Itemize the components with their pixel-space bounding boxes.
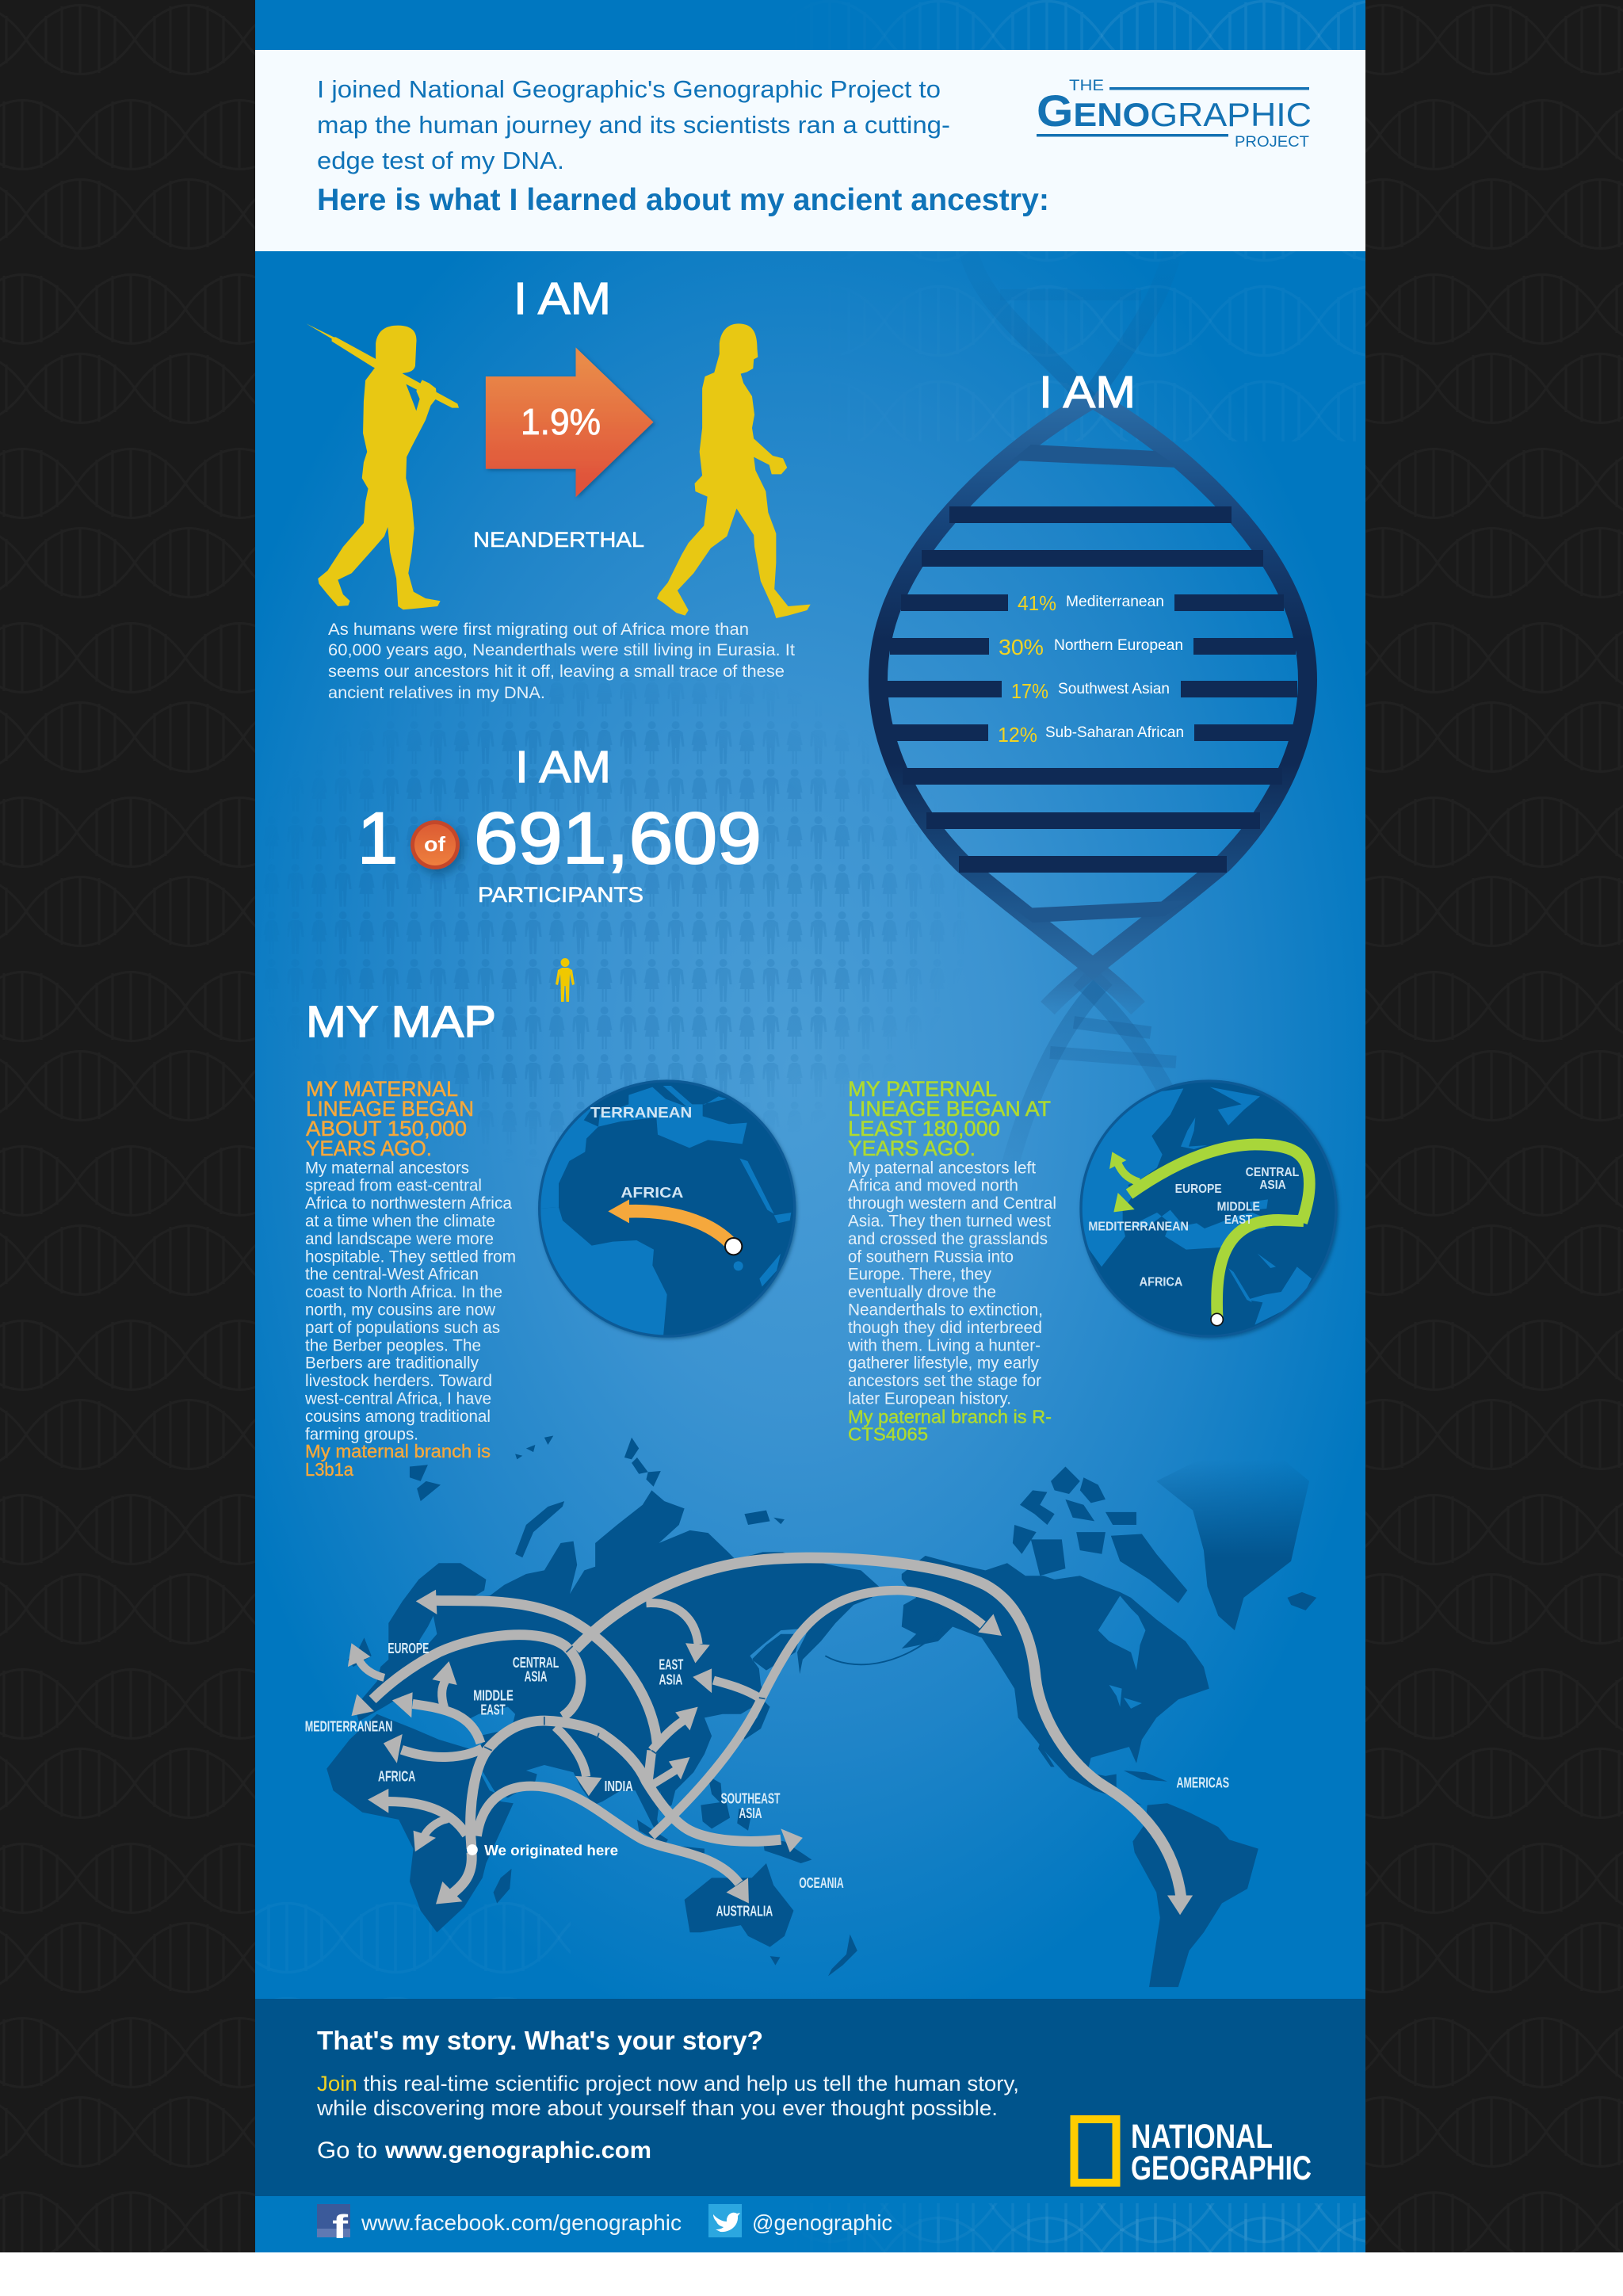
figure: modern human walking xyxy=(657,323,811,618)
paternal branch: CTS4065 xyxy=(848,1424,928,1445)
website link: www.genographic.com xyxy=(384,2137,651,2164)
intro text: I joined National Geographic's Genographic Project to xyxy=(317,75,941,103)
paternal heading: MY PATERNAL xyxy=(848,1077,997,1101)
arrow: east across Asia to Oceania xyxy=(544,1721,803,1852)
logo: National Geographic xyxy=(1075,2118,1312,2187)
logo: National Geographic: NATIONAL xyxy=(1131,2118,1273,2156)
people crowd background pattern xyxy=(458,726,874,1097)
row: Sub-Saharan African: Sub-Saharan African xyxy=(1045,724,1184,741)
arrow: Central Asia loop to Mediterranean xyxy=(351,1635,581,1717)
helix strands xyxy=(878,399,1308,1008)
arrow: north across Asia to the Americas xyxy=(575,1558,1193,1915)
panel: header xyxy=(255,50,1365,251)
region labels: MIDDLE xyxy=(473,1687,514,1703)
row: Southwest Asian xyxy=(1011,679,1170,703)
stat: 1 of 691,609 participants: 691,609 xyxy=(474,798,762,879)
twitter handle: @genographic xyxy=(752,2210,892,2235)
paternal body: Neanderthals to extinction, xyxy=(848,1301,1043,1319)
panel: footer call to action xyxy=(255,1999,1365,2196)
row: Southwest Asian: 17% xyxy=(1011,679,1048,703)
maternal body: north, my cousins are now xyxy=(305,1301,496,1319)
region labels: AUSTRALIA xyxy=(716,1903,773,1920)
orange migration arrow xyxy=(608,1199,742,1255)
paternal body: Africa and moved north xyxy=(848,1177,1018,1195)
region labels: SOUTHEAST xyxy=(721,1790,781,1807)
arrow: southern Europe xyxy=(392,1692,480,1744)
maternal body xyxy=(304,1159,516,1443)
maternal heading xyxy=(306,1077,474,1160)
globe labels xyxy=(1088,1166,1299,1289)
footer body xyxy=(316,2072,1019,2120)
ghost DNA strand below main helix xyxy=(1000,979,1212,1205)
globe labels: MEDITERRANEAN xyxy=(1088,1220,1189,1233)
paternal body: gatherer lifestyle, my early xyxy=(848,1354,1039,1373)
footer body: Join this real-time scientific project now and help us tell the human story, xyxy=(317,2072,1019,2095)
logo: The Genographic Project: THE xyxy=(1069,78,1104,94)
icon: yellow person xyxy=(556,958,575,1002)
arrow: central Africa xyxy=(414,1819,448,1851)
region labels: EAST xyxy=(659,1656,684,1672)
maternal body: cousins among traditional xyxy=(305,1408,491,1426)
arrow: East Asia from Japan xyxy=(693,1668,759,1698)
paternal body: through western and Central xyxy=(848,1194,1056,1213)
row: Mediterranean xyxy=(1018,591,1164,615)
paternal branch: My paternal branch is R- xyxy=(848,1407,1052,1427)
website link: Go to xyxy=(317,2137,377,2164)
maternal body: the Berber peoples. The xyxy=(305,1336,481,1354)
label: Neanderthal: NEANDERTHAL xyxy=(473,528,644,552)
row: Southwest Asian: Southwest Asian xyxy=(1058,681,1170,697)
arrow: western Europe xyxy=(348,1643,384,1678)
maternal branch: My maternal branch is xyxy=(305,1441,491,1461)
arrow: west Africa xyxy=(368,1789,467,1835)
paternal body: and crossed the grasslands xyxy=(848,1230,1048,1248)
text block: Neanderthal explanation: seems our ancestors hit it off, leaving a small trace of these xyxy=(328,663,785,681)
arrow: South China xyxy=(651,1757,690,1785)
text block: maternal lineage xyxy=(304,1077,516,1480)
region labels: ASIA xyxy=(525,1668,548,1684)
logo: The Genographic Project xyxy=(1037,78,1312,151)
text block: Neanderthal explanation: 60,000 years ago, Neanderthals were still living in Eurasia. It xyxy=(328,641,795,659)
paternal heading: YEARS AGO. xyxy=(848,1137,976,1160)
junction separators xyxy=(484,1646,766,1754)
text block: paternal lineage xyxy=(847,1077,1056,1445)
row: Northern European: 30% xyxy=(999,635,1044,659)
arrow: Indochina stem xyxy=(648,1751,651,1782)
row: Northern European xyxy=(999,635,1183,659)
arrow: out of Africa trunk xyxy=(471,1721,544,1849)
maternal body: coast to North Africa. In the xyxy=(305,1283,502,1301)
arrow: southern coastal route to Australia xyxy=(477,1786,749,1904)
decorative faint DNA in corners xyxy=(341,319,1320,1940)
DNA helix with ancestry percentages xyxy=(878,399,1308,1008)
arrow: East Asia from north xyxy=(646,1603,710,1663)
paternal body: though they did interbreed xyxy=(848,1319,1042,1337)
badge: of: of xyxy=(424,832,445,856)
main blue infographic background xyxy=(255,251,1365,1999)
maternal body: Africa to northwestern Africa xyxy=(305,1194,512,1213)
maternal body: hospitable. They settled from xyxy=(305,1247,516,1266)
arrow: up to Balkans xyxy=(432,1661,457,1708)
maternal body: spread from east-central xyxy=(305,1177,482,1195)
region labels: EUROPE xyxy=(388,1640,429,1656)
paternal body: with them. Living a hunter- xyxy=(847,1336,1041,1354)
arrow: China xyxy=(651,1707,698,1751)
paternal body: Europe. There, they xyxy=(848,1266,991,1284)
paternal heading: LEAST 180,000 xyxy=(848,1117,1000,1140)
chart: paternal globe xyxy=(1079,1079,1341,1341)
paternal body: later European history. xyxy=(848,1390,1011,1408)
maternal body: My maternal ancestors xyxy=(305,1159,469,1177)
paternal heading xyxy=(848,1077,1051,1160)
paternal body: My paternal ancestors left xyxy=(848,1159,1036,1177)
paternal body: eventually drove the xyxy=(848,1283,996,1301)
maternal branch: L3b1a xyxy=(305,1459,353,1480)
maternal body: farming groups. xyxy=(305,1425,418,1443)
row: Mediterranean: Mediterranean xyxy=(1066,594,1164,610)
region labels: AFRICA xyxy=(378,1768,415,1785)
logo: The Genographic Project: GENOGRAPHIC xyxy=(1037,86,1312,136)
globe labels: ASIA xyxy=(1259,1179,1286,1192)
region labels: AMERICAS xyxy=(1176,1775,1229,1791)
maternal body: and landscape were more xyxy=(305,1230,494,1248)
paternal body: Asia. They then turned west xyxy=(848,1213,1051,1230)
paternal branch xyxy=(848,1407,1052,1445)
chart: world migration map xyxy=(305,1435,1316,1987)
footer heading: That's my story. What's your story? xyxy=(317,2026,763,2055)
text block: Neanderthal explanation: As humans were first migrating out of Africa more than xyxy=(328,621,749,639)
maternal body: Berbers are traditionally xyxy=(305,1354,479,1373)
stat: 1 of 691,609 participants: 1 xyxy=(357,798,398,879)
stat: 1 of 691,609 participants xyxy=(357,798,762,907)
grey migration arrows xyxy=(348,1558,1193,1915)
region labels xyxy=(305,1640,1229,1920)
footer body: while discovering more about yourself than you ever thought possible. xyxy=(316,2096,998,2120)
region labels: ASIA xyxy=(659,1671,682,1688)
maternal body: at a time when the climate xyxy=(305,1213,495,1230)
heading: I AM (Neanderthal): I AM xyxy=(514,273,611,324)
maternal body: livestock herders. Toward xyxy=(305,1372,492,1390)
icon: Facebook: f xyxy=(332,2208,349,2245)
row: Mediterranean: 41% xyxy=(1018,591,1056,615)
heading: I AM (DNA): I AM xyxy=(1039,367,1136,418)
arrow: 1.9% Neanderthal xyxy=(486,347,654,497)
helix rungs xyxy=(887,506,1297,873)
region labels: EAST xyxy=(480,1702,506,1718)
maternal heading: MY MATERNAL xyxy=(306,1077,458,1101)
globe labels: TERRANEAN xyxy=(590,1104,692,1121)
paternal heading: LINEAGE BEGAN AT xyxy=(848,1097,1051,1121)
figure: Neanderthal with spear xyxy=(306,323,459,609)
world land masses xyxy=(327,1435,1316,1987)
icon: Twitter xyxy=(708,2204,742,2237)
header subtitle: Here is what I learned about my ancient ancestry: xyxy=(317,183,1049,217)
arrow: northern Europe xyxy=(416,1590,657,1744)
paternal body: ancestors set the stage for xyxy=(848,1372,1041,1390)
globe labels: AFRICA xyxy=(1140,1276,1182,1289)
row: Sub-Saharan African: 12% xyxy=(998,723,1037,747)
maternal body: west-central Africa, I have xyxy=(304,1390,491,1408)
maternal body: part of populations such as xyxy=(305,1319,500,1337)
heading: My Map: MY MAP xyxy=(306,996,496,1046)
intro text: map the human journey and its scientists ran a cutting- xyxy=(317,111,950,139)
globe labels xyxy=(590,1104,692,1201)
arrow: India xyxy=(556,1727,601,1796)
globe labels: CENTRAL xyxy=(1246,1166,1299,1179)
label: We originated here: We originated here xyxy=(484,1842,618,1859)
green migration arrow xyxy=(1109,1144,1309,1326)
row: Sub-Saharan African xyxy=(998,723,1184,747)
region labels: ASIA xyxy=(739,1805,762,1821)
logo: National Geographic: GEOGRAPHIC xyxy=(1131,2149,1312,2187)
arrow: North Africa xyxy=(384,1734,483,1763)
globe labels: MIDDLE xyxy=(1217,1200,1260,1213)
maternal heading: YEARS AGO. xyxy=(306,1137,432,1160)
globe labels: EAST xyxy=(1224,1213,1253,1227)
paternal body xyxy=(847,1159,1056,1408)
badge: of xyxy=(411,820,460,869)
region labels: OCEANIA xyxy=(799,1874,844,1891)
maternal heading: LINEAGE BEGAN xyxy=(306,1097,474,1121)
intro text xyxy=(317,75,950,174)
maternal branch xyxy=(305,1441,491,1480)
text block: Neanderthal explanation: ancient relatives in my DNA. xyxy=(328,684,545,702)
logo: The Genographic Project: PROJECT xyxy=(1235,134,1309,151)
globe labels: AFRICA xyxy=(621,1184,683,1201)
arrow: 1.9% Neanderthal: 1.9% xyxy=(521,401,601,442)
top blue band xyxy=(255,0,1365,50)
top and bottom slanted rungs xyxy=(1011,445,1186,923)
panel: social links band xyxy=(255,2196,1365,2252)
origin marker xyxy=(467,1844,478,1855)
globe labels: EUROPE xyxy=(1175,1182,1222,1196)
region labels: CENTRAL xyxy=(513,1654,559,1671)
paternal body: of southern Russia into xyxy=(848,1247,1014,1266)
arrow: Pacific coast to Alaska xyxy=(651,1591,1002,1836)
maternal body: the central-West African xyxy=(305,1266,479,1284)
facebook link: www.facebook.com/genographic xyxy=(361,2210,682,2235)
region labels: INDIA xyxy=(605,1778,633,1794)
ghost DNA strand above main helix xyxy=(968,251,1173,400)
region labels: MEDITERRANEAN xyxy=(305,1717,392,1734)
maternal heading: ABOUT 150,000 xyxy=(306,1117,467,1140)
text block: Neanderthal explanation xyxy=(328,621,795,702)
icon: Facebook xyxy=(317,2204,350,2245)
arrow: south Africa xyxy=(436,1852,472,1904)
Americas (east half of map) xyxy=(825,1445,1316,1987)
intro text: edge test of my DNA. xyxy=(317,147,564,174)
heading: I AM (participants): I AM xyxy=(515,742,611,793)
stat: 1 of 691,609 participants: PARTICIPANTS xyxy=(478,883,643,907)
row: Northern European: Northern European xyxy=(1054,637,1183,654)
chart: maternal globe xyxy=(537,1079,799,1341)
